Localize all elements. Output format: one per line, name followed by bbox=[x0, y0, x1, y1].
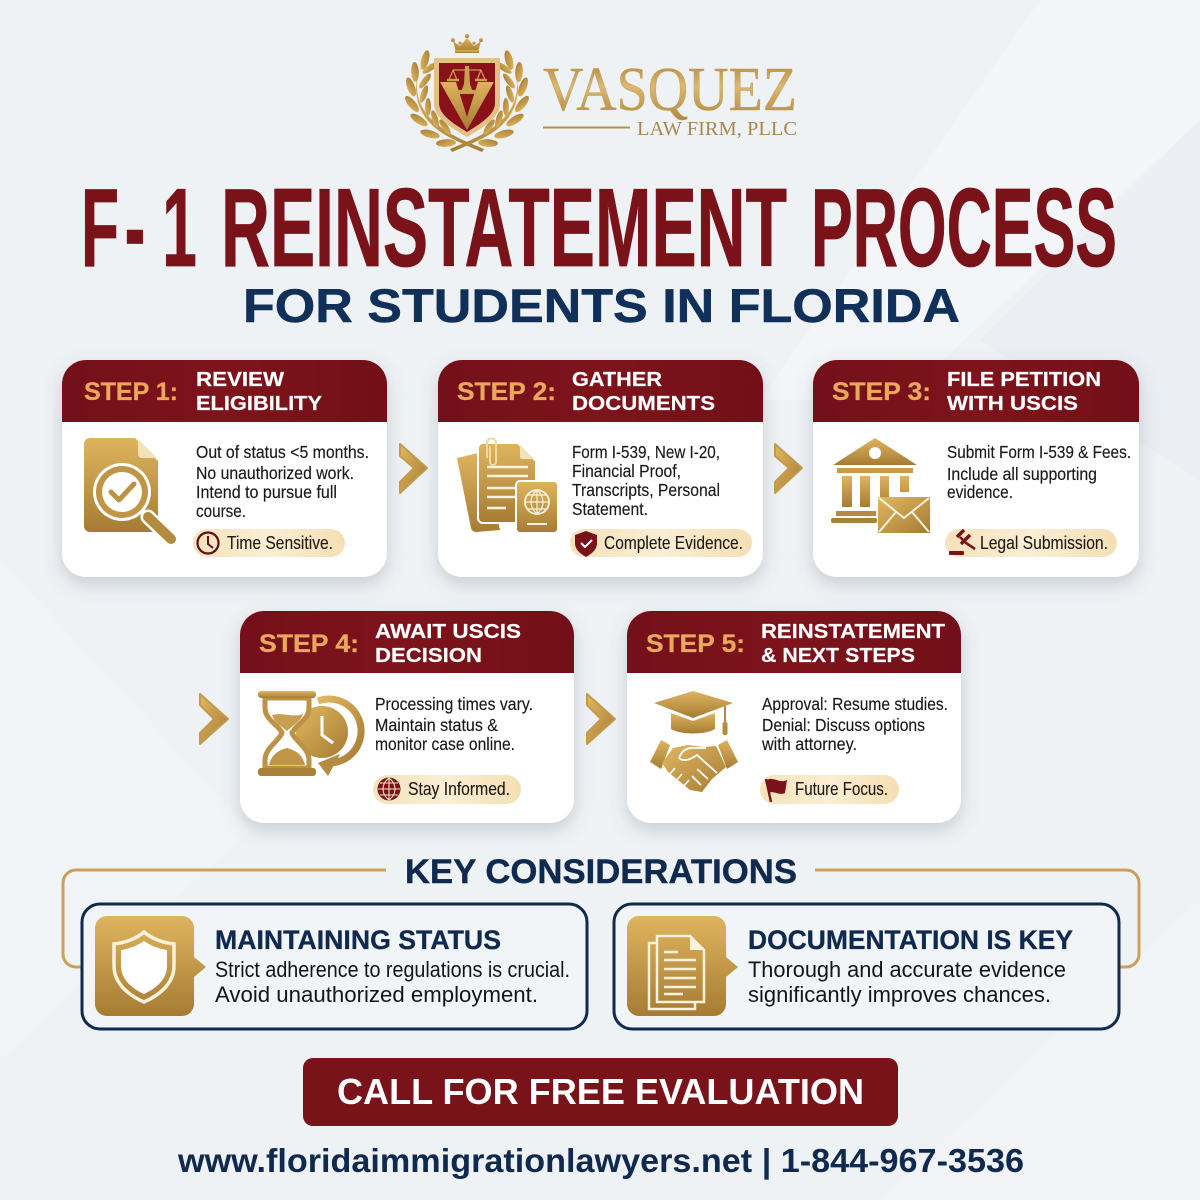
icon: documents and passport bbox=[457, 438, 558, 533]
step 3 header: WITH USCIS bbox=[947, 392, 1078, 415]
step 5 text: with attorney. bbox=[761, 734, 857, 754]
maintaining status text: Strict adherence to regulations is crucial. bbox=[215, 957, 570, 982]
maintaining status text: Avoid unauthorized employment. bbox=[215, 982, 538, 1007]
step 3 text: Include all supporting bbox=[947, 464, 1097, 484]
step 4 header: STEP 4: bbox=[259, 630, 359, 658]
icon: crown bbox=[451, 34, 483, 53]
badge: future focus: Future Focus. bbox=[795, 779, 888, 799]
step 1 text: No unauthorized work. bbox=[196, 463, 354, 483]
badge: legal submission bbox=[945, 529, 1117, 557]
step 2 text: Form I-539, New I-20, bbox=[572, 442, 720, 462]
maintaining status text bbox=[215, 957, 570, 1007]
panel: step 1 bbox=[62, 360, 387, 577]
step 1 text bbox=[196, 442, 369, 521]
bracket line: right bbox=[815, 870, 1139, 967]
badge: stay informed bbox=[373, 775, 521, 804]
step 4 header: DECISION bbox=[375, 644, 482, 667]
step 5 header: STEP 5: bbox=[646, 630, 745, 658]
arrow: step 1 to 2 bbox=[400, 444, 427, 493]
step 5 text bbox=[761, 694, 948, 754]
logo: Vasquez Law Firm bbox=[403, 34, 797, 152]
title: REINSTATEMENT bbox=[221, 166, 787, 290]
icon: shield bbox=[434, 58, 500, 137]
arrow: step 2 to 3 bbox=[775, 444, 802, 493]
badge: future focus bbox=[760, 775, 899, 804]
panel: step 2 bbox=[438, 360, 763, 577]
step 1 header bbox=[62, 360, 387, 422]
step 4 text: monitor case online. bbox=[375, 734, 515, 754]
icon: courthouse and envelope bbox=[831, 438, 930, 533]
icon: graduation cap and handshake bbox=[650, 691, 738, 792]
step 3 header bbox=[813, 360, 1139, 422]
icon: document tile bbox=[627, 916, 738, 1016]
step 3 header: FILE PETITION bbox=[947, 368, 1101, 391]
step 1 text: Intend to pursue full bbox=[196, 482, 337, 502]
step 5 header: & NEXT STEPS bbox=[761, 644, 915, 667]
step 3 text: evidence. bbox=[947, 482, 1013, 502]
badge: legal submission: Legal Submission. bbox=[980, 533, 1108, 553]
badge: time sensitive: Time Sensitive. bbox=[227, 533, 333, 553]
icon: hourglass and clock bbox=[258, 691, 361, 776]
step 2 text: Statement. bbox=[572, 499, 648, 519]
badge: stay informed: Stay Informed. bbox=[408, 779, 510, 799]
step 3 header: STEP 3: bbox=[832, 378, 931, 406]
step 4 text: Processing times vary. bbox=[375, 694, 533, 714]
call to action button: CALL FOR FREE EVALUATION bbox=[337, 1071, 864, 1112]
contact line: www.floridaimmigrationlawyers.net | 1-844-967-3536 bbox=[177, 1142, 1024, 1179]
step 1 header: ELIGIBILITY bbox=[196, 392, 322, 415]
panel: step 3 bbox=[813, 360, 1139, 577]
panel: documentation is key bbox=[614, 904, 1119, 1029]
step 2 text: Financial Proof, bbox=[572, 461, 681, 481]
arrow: into step 4 bbox=[200, 694, 228, 744]
step 3 text: Submit Form I-539 & Fees. bbox=[947, 442, 1131, 462]
subtitle: FOR STUDENTS IN FLORIDA bbox=[243, 279, 960, 332]
logo wordmark: VASQUEZ bbox=[543, 56, 797, 124]
step 1 text: course. bbox=[196, 501, 246, 521]
key considerations heading: KEY CONSIDERATIONS bbox=[405, 853, 797, 891]
badge: time sensitive bbox=[193, 529, 345, 557]
step 4 text bbox=[375, 694, 533, 754]
step 1 header: REVIEW bbox=[196, 368, 285, 391]
step 4 text: Maintain status & bbox=[375, 715, 498, 735]
step 1 text: Out of status <5 months. bbox=[196, 442, 369, 462]
logo subline: LAW FIRM, PLLC bbox=[637, 118, 797, 140]
step 5 text: Denial: Discuss options bbox=[762, 715, 925, 735]
documentation heading: DOCUMENTATION IS KEY bbox=[748, 925, 1073, 955]
badge: complete evidence: Complete Evidence. bbox=[604, 533, 743, 553]
title: F-1 bbox=[81, 167, 197, 291]
step 5 header bbox=[627, 611, 961, 673]
step 5 header: REINSTATEMENT bbox=[761, 620, 946, 643]
panel: step 4 bbox=[240, 611, 574, 823]
step 2 header: GATHER bbox=[572, 368, 662, 391]
icon: laurel wreath bbox=[403, 49, 531, 152]
step 4 header: AWAIT USCIS bbox=[375, 620, 521, 643]
documentation text: Thorough and accurate evidence bbox=[748, 957, 1066, 982]
icon: shield tile bbox=[95, 916, 206, 1016]
step 2 text bbox=[572, 442, 720, 519]
panel: step 5 bbox=[627, 611, 961, 823]
step 2 header bbox=[438, 360, 763, 422]
arrow: step 4 to 5 bbox=[587, 694, 615, 744]
step 4 header bbox=[240, 611, 574, 673]
documentation text: significantly improves chances. bbox=[748, 982, 1051, 1007]
panel: maintaining status bbox=[82, 904, 587, 1029]
step 2 header: DOCUMENTS bbox=[572, 392, 715, 415]
documentation text bbox=[748, 957, 1066, 1007]
bracket line: left bbox=[63, 870, 386, 967]
step 3 text bbox=[947, 442, 1131, 502]
call to action button bbox=[303, 1058, 898, 1126]
icon: document with magnifier bbox=[84, 438, 171, 539]
step 1 header: STEP 1: bbox=[84, 378, 178, 406]
step 5 text: Approval: Resume studies. bbox=[762, 694, 948, 714]
step 2 text: Transcripts, Personal bbox=[572, 480, 720, 500]
badge: complete evidence bbox=[570, 529, 752, 557]
maintaining status heading: MAINTAINING STATUS bbox=[215, 925, 501, 955]
step 2 header: STEP 2: bbox=[457, 378, 556, 406]
